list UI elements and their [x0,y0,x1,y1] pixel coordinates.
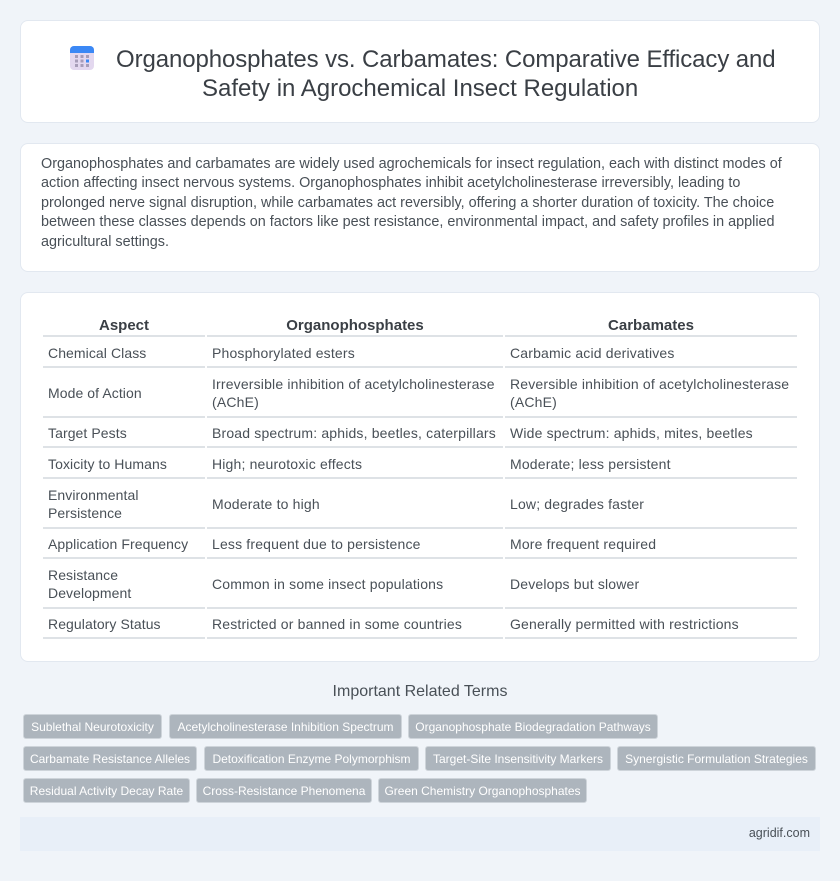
comparison table: Environmental [48,487,139,503]
comparison table: Carbamates [608,317,694,334]
footer site name: agridif.com [749,826,810,840]
comparison table [43,317,797,639]
title: Safety in Agrochemical Insect Regulation [202,75,638,102]
comparison table: Organophosphates [286,317,424,334]
related term tags: Acetylcholinesterase Inhibition Spectrum [177,720,394,734]
comparison table: Aspect [99,317,149,334]
panel: header card [20,20,820,123]
comparison table: Carbamic acid derivatives [510,345,675,361]
comparison table: Low; degrades faster [510,496,644,512]
comparison table: Persistence [48,505,122,521]
comparison table: Moderate; less persistent [510,456,671,472]
intro text: prolonged nerve signal disruption, while carbamates act reversibly, offering a shorter duration of toxicity. The choice [41,195,774,211]
comparison table: Regulatory Status [48,616,161,632]
related term tags: Cross-Resistance Phenomena [203,784,365,798]
intro text: agricultural settings. [41,234,169,250]
comparison table: (AChE) [212,394,259,410]
comparison table: More frequent required [510,536,656,552]
icon: calendar [70,46,94,70]
comparison table: High; neurotoxic effects [212,456,362,472]
comparison table: Less frequent due to persistence [212,536,421,552]
intro text: Organophosphates and carbamates are widely used agrochemicals for insect regulation, each with distinct modes of [41,156,782,172]
comparison table: Development [48,585,131,601]
comparison table: Toxicity to Humans [48,456,167,472]
related term tags: Synergistic Formulation Strategies [625,752,808,766]
comparison table: Common in some insect populations [212,576,443,592]
comparison table: Irreversible inhibition of acetylcholinesterase [212,376,495,392]
comparison table: Generally permitted with restrictions [510,616,739,632]
related term tags: Residual Activity Decay Rate [30,784,183,798]
related term tags: Target-Site Insensitivity Markers [433,752,603,766]
panel: comparison table [20,292,820,662]
intro text [41,156,782,250]
footer bar [20,817,820,851]
comparison table: (AChE) [510,394,557,410]
intro text: between these classes depends on factors like pest resistance, environmental impact, and safety profiles in applied [41,214,775,230]
comparison table: Develops but slower [510,576,639,592]
comparison table: Wide spectrum: aphids, mites, beetles [510,425,753,441]
comparison table: Restricted or banned in some countries [212,616,462,632]
comparison table: Broad spectrum: aphids, beetles, caterpillars [212,425,496,441]
related term tags: Carbamate Resistance Alleles [30,752,190,766]
related term tags [23,714,816,803]
comparison table: Reversible inhibition of acetylcholinesterase [510,376,789,392]
title [116,46,776,102]
comparison table: Resistance [48,567,118,583]
related term tags: Sublethal Neurotoxicity [31,720,154,734]
comparison table: Moderate to high [212,496,320,512]
related term tags: Detoxification Enzyme Polymorphism [212,752,411,766]
related terms heading: Important Related Terms [333,683,507,700]
panel: introduction [20,143,820,272]
title: Organophosphates vs. Carbamates: Comparative Efficacy and [116,46,776,73]
comparison table: Mode of Action [48,385,142,401]
comparison table: Phosphorylated esters [212,345,355,361]
comparison table: Application Frequency [48,536,188,552]
intro text: action affecting insect nervous systems. Organophosphates inhibit acetylcholinesterase irreversibly, leading to [41,175,740,191]
comparison table: Chemical Class [48,345,146,361]
related term tags: Green Chemistry Organophosphates [384,784,581,798]
comparison table: Target Pests [48,425,127,441]
related term tags: Organophosphate Biodegradation Pathways [415,720,651,734]
